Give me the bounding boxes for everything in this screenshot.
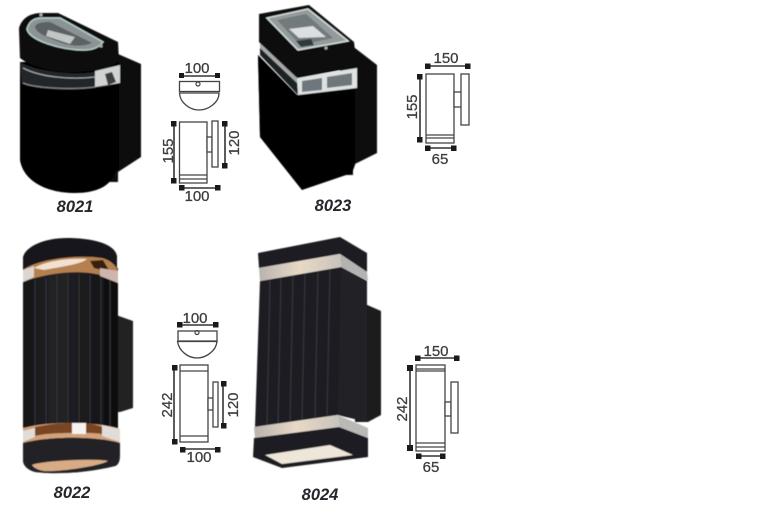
dimension drawing: 8024: 65 (423, 459, 439, 476)
dimension drawing: 8023: 150 (433, 50, 459, 67)
dimension drawing: 8023: 155 (404, 94, 421, 120)
dimension drawing: 8024: 242 (394, 396, 411, 422)
dimension drawing: 8022: 100 (186, 449, 212, 466)
model label: 8021: 8021 (57, 198, 93, 216)
dimension drawing: 8021: 120 (226, 130, 243, 156)
model label: 8022: 8022 (54, 484, 90, 502)
dimension drawing: 8021: 100 (184, 60, 210, 77)
dimension drawing: 8023: 65 (432, 151, 448, 168)
dimension drawing: 8022 (159, 310, 242, 466)
lamp photo: 8024 (253, 237, 381, 468)
lamp photo: 8021 (19, 13, 141, 193)
dimension drawing: 8021: 100 (184, 188, 210, 205)
dimension drawing: 8021: 155 (160, 138, 177, 164)
model label: 8024: 8024 (302, 486, 338, 504)
lamp photo: 8023 (258, 5, 377, 190)
dimension drawing: 8024: 150 (423, 343, 449, 360)
dimension drawing: 8023 (404, 50, 470, 168)
lamp photo: 8022 (23, 238, 133, 473)
dimension drawing: 8022: 120 (225, 392, 242, 418)
dimension drawing: 8022: 100 (182, 310, 208, 327)
dimension drawing: 8024 (394, 343, 460, 476)
dimension drawing: 8021 (160, 60, 243, 205)
model label: 8023: 8023 (315, 197, 351, 215)
dimension drawing: 8022: 242 (159, 392, 176, 418)
